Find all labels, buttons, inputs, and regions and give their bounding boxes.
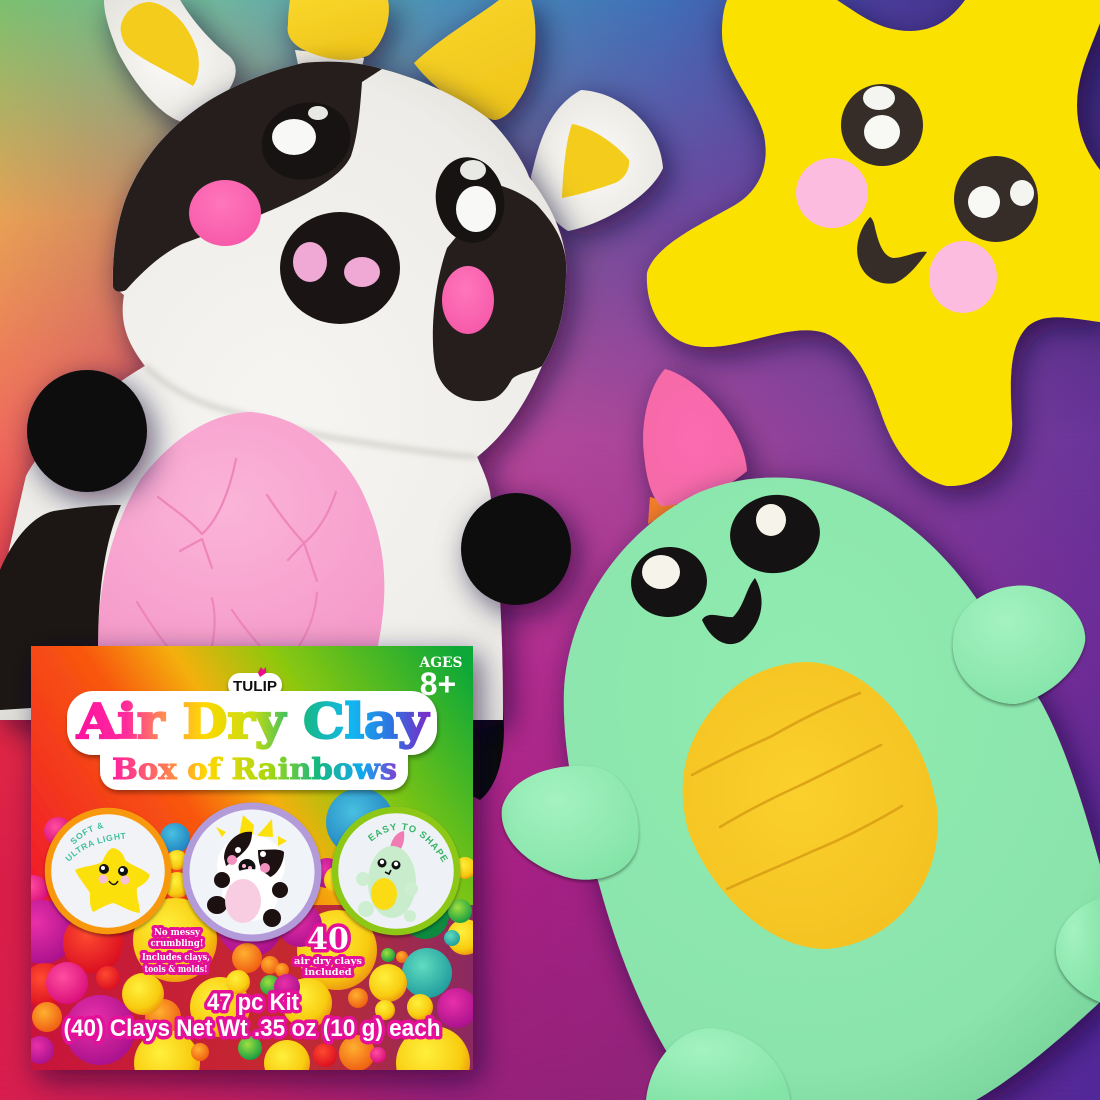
cow left ear — [104, 0, 236, 122]
dino horn — [643, 369, 747, 524]
cow chin crease — [145, 366, 477, 457]
star smile — [857, 217, 927, 284]
callout: 40 air dry clays included: 40 — [307, 922, 349, 957]
cow left cheek — [189, 180, 261, 246]
cow top horn — [288, 0, 389, 67]
callout: no messy crumbling — [142, 928, 210, 975]
dino body — [564, 478, 1100, 1100]
cow left arm — [27, 370, 147, 492]
cow left eye — [251, 91, 361, 191]
badge caption: easy to shape: EASY TO SHAPE — [368, 823, 448, 862]
mini star — [75, 848, 150, 913]
callout: no messy crumbling: Includes clays, — [142, 953, 210, 963]
callout: 40 air dry clays included: included — [304, 968, 352, 978]
mini cow — [207, 815, 288, 927]
callout: no messy crumbling: tools & molds! — [144, 965, 208, 975]
clay star — [647, 0, 1100, 486]
clay dinosaur — [502, 369, 1100, 1100]
dino smile — [702, 578, 762, 644]
dino left eye — [626, 542, 712, 622]
product box — [16, 632, 502, 1100]
callout: 40 air dry clays included: air dry clays — [294, 957, 362, 967]
cow head and body silhouette — [0, 62, 566, 720]
mini dinosaur — [356, 831, 418, 922]
callout: 40 air dry clays included — [294, 922, 362, 978]
cow right black patch — [433, 185, 566, 401]
badge: easy to shape dinosaur — [330, 807, 462, 939]
dino right eye — [725, 489, 825, 579]
cow right ear — [531, 90, 663, 231]
dino right arm — [953, 585, 1085, 704]
cow rear leg behind box — [460, 680, 504, 800]
clay cow — [0, 0, 663, 800]
age badge: AGES — [419, 655, 462, 671]
tulip logo — [228, 667, 282, 697]
badge caption: soft & ultra light: SOFT & — [70, 822, 104, 844]
dino left arm — [502, 766, 639, 880]
dino right lower arm — [1056, 898, 1100, 1002]
cow right arm — [461, 493, 571, 605]
dino left foot — [646, 1028, 790, 1100]
kit size and net weight — [64, 989, 440, 1042]
star left eye — [841, 84, 923, 166]
title: air dry clay: Air Dry Clay — [76, 694, 430, 750]
star right eye — [954, 156, 1038, 242]
subtitle: box of rainbows: Box of Rainbows — [112, 752, 397, 786]
badge: soft and ultra light star — [42, 808, 174, 938]
age badge — [419, 655, 462, 702]
cow right cheek — [442, 266, 494, 334]
cow pink belly — [98, 412, 384, 650]
colorful clay balls — [31, 790, 473, 1070]
star left cheek — [796, 158, 868, 228]
box background — [31, 646, 473, 1070]
kit size and net weight: (40) Clays Net Wt .35 oz (10 g) each — [64, 1015, 440, 1042]
cow right eye — [429, 152, 511, 248]
age badge: 8+ — [420, 666, 456, 702]
callout: no messy crumbling: crumbling! — [150, 939, 204, 949]
dino yellow belly — [683, 662, 938, 949]
cow left leg — [0, 505, 121, 710]
star right cheek — [929, 241, 997, 313]
title plate — [67, 691, 437, 790]
badge caption: soft & ultra light: ULTRA LIGHT — [65, 832, 126, 861]
badge: cow — [186, 806, 318, 938]
star body — [647, 0, 1100, 486]
cow right horn — [414, 0, 535, 128]
kit size and net weight: 47 pc Kit — [207, 989, 299, 1016]
callout: no messy crumbling: No messy — [154, 928, 201, 938]
cow left black patch — [113, 62, 382, 292]
cow nose — [280, 212, 400, 324]
tulip logo: TULIP — [233, 678, 277, 695]
